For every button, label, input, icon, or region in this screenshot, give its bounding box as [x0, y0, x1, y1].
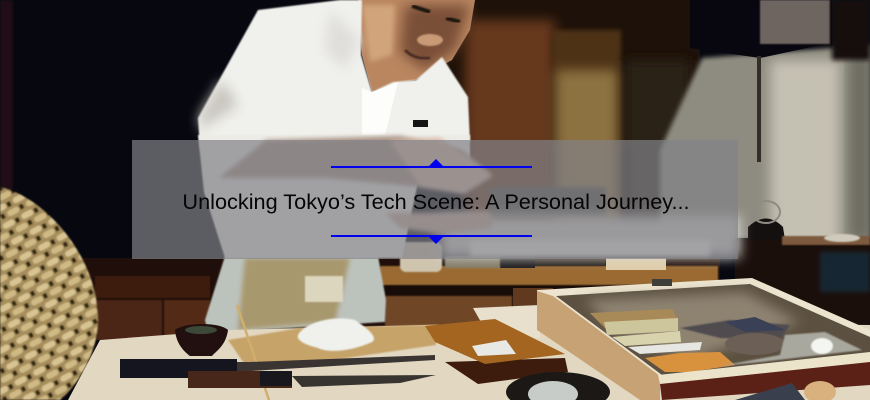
bottom triangle	[428, 236, 444, 244]
wicker basket	[0, 187, 98, 400]
top rule with up triangle	[331, 166, 532, 168]
face	[358, 0, 475, 92]
case front edge	[658, 352, 870, 384]
top triangle	[428, 159, 444, 167]
apron	[205, 256, 386, 333]
white jacket	[198, 0, 470, 150]
crushed ice	[720, 332, 862, 366]
citrus slices	[645, 352, 735, 372]
chopstick skewer	[237, 305, 269, 400]
front counter	[68, 305, 870, 400]
translucent title panel	[132, 140, 738, 259]
small dark bowl	[175, 324, 228, 356]
eyes and nose	[412, 6, 430, 12]
ceramic bowl with glass	[506, 372, 610, 400]
forearm and hands	[219, 136, 492, 193]
chef	[198, 0, 492, 333]
title: Unlocking Tokyo’s Tech Scene: A Personal Journey...	[182, 189, 690, 214]
wooden serving board	[425, 319, 568, 384]
glass display case	[537, 278, 870, 400]
iron teapot	[748, 201, 785, 240]
knife with black handle	[120, 355, 435, 378]
bottom rule with down triangle	[331, 235, 532, 237]
metal dish	[725, 333, 785, 355]
lower-right counter items	[735, 381, 836, 400]
jacket embroidery	[413, 120, 428, 127]
tofu blocks	[590, 309, 678, 328]
back counter with dishes	[80, 187, 740, 340]
fish and seafood	[680, 320, 790, 340]
folded white towel	[298, 318, 374, 351]
folded paper packets	[472, 340, 516, 356]
wall pipe	[757, 56, 761, 162]
jacket lower body under panel	[198, 135, 470, 258]
kitchen hood	[690, 0, 835, 58]
knife with wood handle	[188, 371, 436, 388]
